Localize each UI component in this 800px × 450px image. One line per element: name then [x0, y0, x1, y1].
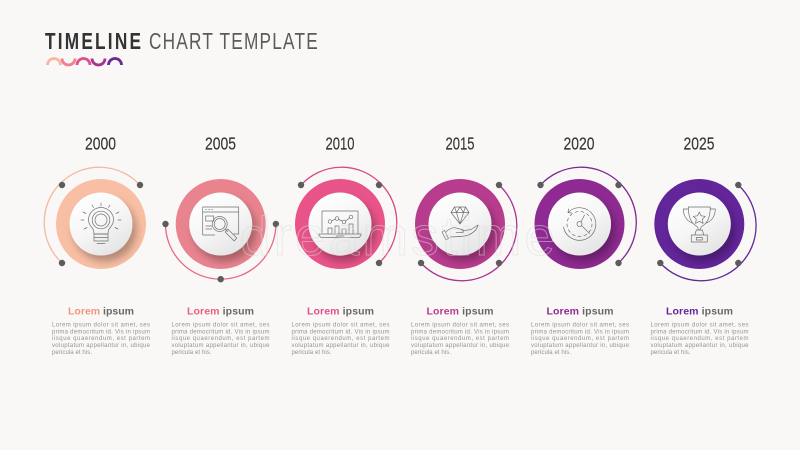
text block 2015	[411, 306, 510, 356]
year 2010: 2010	[326, 133, 355, 153]
node 2025	[654, 179, 756, 281]
icon: laptop with chart	[319, 211, 361, 238]
icon: browser window with magnifier	[203, 207, 239, 241]
text block 2005: Lorem ipsum	[187, 306, 254, 318]
text block 2005: Lorem ipsum dolor sit amet, ses	[172, 322, 270, 328]
text block 2020: Lorem ipsum	[546, 306, 614, 318]
title wave ornament	[48, 58, 122, 65]
text block 2015: voluptatum appellantur in, ubique	[411, 343, 510, 349]
text block 2010: voluptatum appellantur in, ubique	[292, 343, 390, 349]
text block 2020	[531, 306, 630, 356]
icon: hand holding diamond	[442, 207, 478, 240]
text block 2010: Lorem ipsum	[307, 306, 374, 318]
node 2015	[415, 179, 517, 281]
text block 2020: prima democritum id. Vis in ipsum	[531, 329, 629, 335]
text block 2005: iisque quaerendum, est partem	[172, 336, 270, 342]
text block 2025: voluptatum appellantur in, ubique	[650, 343, 749, 349]
text block 2000: iisque quaerendum, est partem	[52, 336, 150, 342]
text block 2000: prima democritum id. Vis in ipsum	[52, 329, 150, 335]
text block 2005: voluptatum appellantur in, ubique	[172, 343, 270, 349]
text block 2015: pericula et his.	[411, 350, 451, 356]
icon: clock with circular arrow	[564, 208, 596, 240]
year 2020: 2020	[564, 133, 595, 153]
text block 2015: Lorem ipsum dolor sit amet, ses	[411, 322, 509, 328]
text block 2010: pericula et his.	[292, 350, 332, 356]
text block 2025	[650, 306, 749, 356]
text block 2025: prima democritum id. Vis in ipsum	[650, 329, 748, 335]
year 2005: 2005	[205, 133, 236, 153]
year 2015: 2015	[446, 133, 474, 153]
text block 2000: voluptatum appellantur in, ubique	[52, 343, 151, 349]
year 2025: 2025	[684, 133, 714, 153]
icon: trophy with star	[683, 207, 715, 242]
node 2005	[162, 179, 279, 282]
year 2000: 2000	[85, 133, 116, 153]
text block 2000: Lorem ipsum	[68, 306, 134, 318]
text block 2005	[172, 306, 270, 356]
watermark: dreamstime	[240, 205, 555, 267]
text block 2015: Lorem ipsum	[426, 306, 494, 318]
text block 2015: iisque quaerendum, est partem	[411, 336, 509, 342]
text block 2010	[292, 306, 390, 356]
title	[45, 30, 318, 55]
node 2020	[534, 167, 636, 269]
text block 2000	[52, 306, 151, 356]
text block 2000: pericula et his.	[52, 350, 92, 356]
text block 2025: Lorem ipsum	[666, 306, 733, 318]
text block 2005: pericula et his.	[172, 350, 212, 356]
text block 2020: iisque quaerendum, est partem	[531, 336, 629, 342]
text block 2010: iisque quaerendum, est partem	[292, 336, 390, 342]
text block 2025: Lorem ipsum dolor sit amet, ses	[650, 322, 748, 328]
text block 2025: iisque quaerendum, est partem	[650, 336, 748, 342]
text block 2010: Lorem ipsum dolor sit amet, ses	[292, 322, 390, 328]
text block 2020: Lorem ipsum dolor sit amet, ses	[531, 322, 629, 328]
title: TIMELINE	[45, 30, 141, 55]
text block 2025: pericula et his.	[650, 350, 691, 356]
node 2010	[295, 167, 397, 269]
text block 2015: prima democritum id. Vis in ipsum	[411, 329, 509, 335]
text block 2005: prima democritum id. Vis in ipsum	[172, 329, 270, 335]
title: CHART TEMPLATE	[149, 30, 318, 55]
text block 2020: voluptatum appellantur in, ubique	[531, 343, 630, 349]
icon: light bulb with gear	[81, 203, 121, 244]
text block 2000: Lorem ipsum dolor sit amet, ses	[52, 322, 150, 328]
text block 2010: prima democritum id. Vis in ipsum	[292, 329, 390, 335]
text block 2020: pericula et his.	[531, 350, 571, 356]
node 2000	[44, 167, 146, 269]
